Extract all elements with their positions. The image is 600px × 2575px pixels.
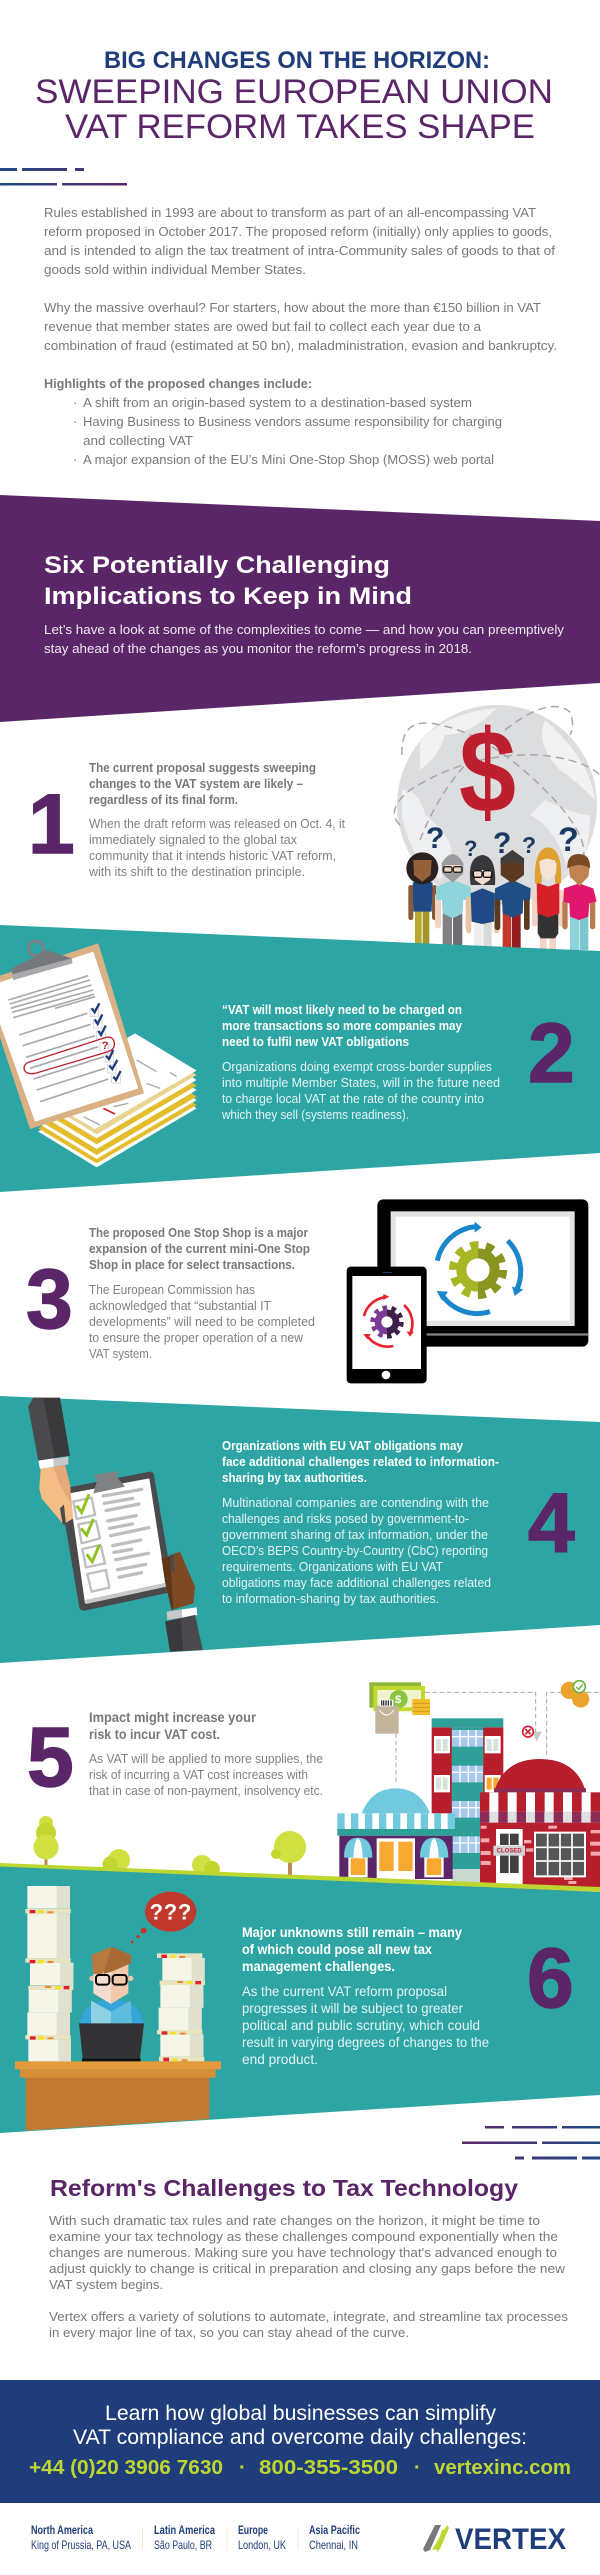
closing text: adjust quickly to change is critical in preparation and closing any gaps before the new <box>49 2261 566 2276</box>
closing text: in every major line of tax, so you can stay ahead of the curve. <box>49 2325 409 2340</box>
closing text: changes are numerous. Making sure you have technology that's advanced enough to <box>49 2245 557 2260</box>
item 2: text: into multiple Member States, will in the future need <box>222 1076 500 1090</box>
desk <box>15 2061 221 2131</box>
item 5: text: risk of incurring a VAT cost increases with <box>89 1768 308 1782</box>
thought bubble: ??? <box>150 1900 191 1925</box>
item 1: text: immediately signaled to the global tax <box>89 833 298 847</box>
item 4: text: OECD’s BEPS Country-by-Country (CbC) reporting <box>222 1544 488 1558</box>
icon: blue arrows <box>437 1222 523 1314</box>
person 2 <box>435 854 472 945</box>
item 1: text: changes to the VAT system are likely – <box>89 777 303 791</box>
icon: coins with check <box>561 1681 589 1708</box>
thought bubble <box>131 1892 196 1943</box>
item 1: text: community that it intends historic VAT reform, <box>89 849 336 863</box>
lower hand <box>162 1552 203 1652</box>
illustration: laptop and tablet with gears <box>347 1199 588 1383</box>
illustration: worker buried in paper stacks <box>15 1886 221 2131</box>
panel: item 6 teal band <box>0 1866 600 2133</box>
question marks: ? <box>464 836 477 861</box>
item 4: text: face additional challenges related to information- <box>222 1455 499 1469</box>
intro text: reform proposed in October 2017. The proposed reform (initially) only applies to goods, <box>44 224 552 239</box>
item 6: text: Major unknowns still remain – many <box>242 1924 462 1940</box>
icon: green gear <box>453 1245 503 1295</box>
item 4: text: sharing by tax authorities. <box>222 1471 367 1485</box>
ground line <box>0 1863 600 1892</box>
closing text: VAT system begins. <box>49 2277 163 2292</box>
item 4: text: to information-sharing by tax authorities. <box>222 1592 439 1606</box>
person 5 <box>532 847 564 950</box>
title: BIG CHANGES ON THE HORIZON: <box>104 47 490 74</box>
item 3: text: developments” will need to be completed <box>89 1315 315 1329</box>
upper hand <box>28 1398 73 1525</box>
item 3: text <box>89 1226 315 1361</box>
footer offices: London, UK <box>238 2538 286 2552</box>
item 2: text: to charge local VAT at the rate of the country into <box>222 1092 484 1106</box>
contact details: · <box>414 2457 421 2479</box>
intro text: Why the massive overhaul? For starters, how about the more than €150 billion in VAT <box>44 300 541 315</box>
item 4: text: requirements. Organizations with EU VAT <box>222 1560 443 1574</box>
contact details: +44 (0)20 3906 7630 <box>29 2457 223 2479</box>
heading: reform's challenges: Reform's Challenges to Tax Technology <box>50 2175 518 2201</box>
monitor <box>377 1199 588 1347</box>
intro text: combination of fraud (estimated at 50 bn), maladministration, evasion and bankruptcy. <box>44 338 557 353</box>
contact details: vertexinc.com <box>434 2457 571 2479</box>
illustration: city with shops and payment flow <box>337 1681 600 1891</box>
panel: six implications banner <box>0 495 600 722</box>
banner text <box>44 622 565 656</box>
call to action text: VAT compliance and overcome daily challenges: <box>73 2426 527 2449</box>
intro text: goods sold within individual Member States. <box>44 262 306 277</box>
illustration: globe, dollar and people <box>394 705 600 950</box>
banner text: Let’s have a look at some of the complexities to come — and how you can preemptively <box>44 622 565 637</box>
question marks: ? <box>426 822 444 855</box>
item 6: text: of which could pose all new tax <box>242 1941 432 1957</box>
call to action text: Learn how global businesses can simplify <box>105 2402 496 2425</box>
item 4: text: obligations may face additional challenges related <box>222 1576 491 1590</box>
question marks <box>426 821 579 861</box>
item 6: text: end product. <box>242 2051 318 2067</box>
item 3: text: expansion of the current mini-One Stop <box>89 1242 310 1256</box>
item 2: text <box>221 1003 500 1122</box>
item 4: text: Organizations with EU VAT obligations may <box>222 1439 463 1453</box>
item 3: text: to ensure the proper operation of a new <box>89 1331 304 1345</box>
icon: banknote and bag <box>369 1682 430 1734</box>
person 4 <box>495 850 531 950</box>
highlights list: Having Business to Business vendors assume responsibility for charging <box>83 414 502 429</box>
item 6: text: As the current VAT reform proposal <box>242 1983 447 1999</box>
right paper stack <box>157 1953 205 2061</box>
apartment building <box>432 1718 503 1882</box>
panel: item 2 teal band <box>0 925 600 1192</box>
item 6: text: political and public scrutiny, which could <box>242 2017 480 2033</box>
item 6: text: progresses it will be subject to greater <box>242 2000 463 2016</box>
highlights list: A shift from an origin-based system to a destination-based system <box>83 395 472 410</box>
laptop <box>79 2023 144 2061</box>
item 1: text: with its shift to the destination principle. <box>88 865 305 879</box>
dashed flow lines <box>396 1692 600 1784</box>
banner heading <box>44 552 412 610</box>
person 1 <box>406 852 438 944</box>
item 4: number: 4 <box>528 1476 575 1570</box>
worker <box>79 1947 144 2061</box>
illustration: clipboard and papers <box>0 941 197 1167</box>
item 4: text: government sharing of tax information, under the <box>222 1528 488 1542</box>
item 1: number: 1 <box>28 777 75 871</box>
footer offices <box>31 2523 360 2552</box>
icon: dollar sign: $ <box>459 706 516 838</box>
item 1: text: The current proposal suggests sweeping <box>89 761 316 775</box>
highlights list: and collecting VAT <box>83 433 193 448</box>
panel: call to action <box>0 2380 600 2503</box>
highlights list: · <box>73 395 77 410</box>
item 5: number: 5 <box>27 1710 74 1804</box>
item 1: text: regardless of its final form. <box>89 793 238 807</box>
clipboard: ? <box>102 1040 109 1052</box>
footer offices: Chennai, IN <box>309 2538 358 2552</box>
item 3: number: 3 <box>26 1252 73 1346</box>
left paper stack <box>25 1886 73 2061</box>
intro text: Rules established in 1993 are about to transform as part of an all-encompassing VAT <box>44 205 536 220</box>
highlights list: A major expansion of the EU’s Mini One-Stop Shop (MOSS) web portal <box>83 452 494 467</box>
item 3: text: The proposed One Stop Shop is a major <box>89 1226 308 1240</box>
illustration: trees <box>34 1816 306 1877</box>
item 4: text: challenges and risks posed by government-to- <box>222 1512 469 1526</box>
title: SWEEPING EUROPEAN UNION <box>35 73 553 111</box>
item 2: text: “VAT will most likely need to be charged on <box>222 1003 462 1017</box>
contact details <box>29 2457 571 2479</box>
item 5: text: Impact might increase your <box>89 1709 256 1725</box>
footer offices: King of Prussia, PA, USA <box>31 2538 131 2552</box>
globe <box>394 705 600 905</box>
item 6: text: management challenges. <box>242 1958 395 1974</box>
tablet <box>347 1267 427 1383</box>
call to action text <box>73 2402 527 2449</box>
title: VAT REFORM TAKES SHAPE <box>65 108 535 146</box>
item 3: text: acknowledged that “substantial IT <box>89 1299 271 1313</box>
footer offices: São Paulo, BR <box>154 2538 212 2552</box>
title <box>35 47 553 146</box>
item 2: text: Organizations doing exempt cross-border supplies <box>222 1060 492 1074</box>
item 5: text: that in case of non-payment, insolvency etc. <box>89 1784 323 1798</box>
item 1: text <box>88 761 346 879</box>
item 4: text: Multinational companies are contending with the <box>222 1496 489 1510</box>
item 6: text: result in varying degrees of changes to the <box>242 2034 489 2050</box>
footer offices: Asia Pacific <box>309 2523 360 2537</box>
panel: item 4 teal band <box>0 1396 600 1663</box>
banner heading: Six Potentially Challenging <box>44 552 390 579</box>
item 3: text: Shop in place for select transactions. <box>89 1258 295 1272</box>
highlights list: · <box>73 414 77 429</box>
intro text <box>44 205 557 353</box>
item 2: text: which they sell (systems readiness). <box>221 1108 409 1122</box>
paper stack <box>33 1033 197 1167</box>
closed red shop: CLOSED <box>497 1848 522 1855</box>
item 2: text: more transactions so more companies may <box>222 1019 462 1033</box>
highlights list: Highlights of the proposed changes include: <box>44 376 312 391</box>
question marks: ? <box>558 821 579 859</box>
footer offices: North America <box>31 2523 93 2537</box>
clipboard <box>60 1471 173 1611</box>
highlights list: · <box>73 452 77 467</box>
item 1: text: When the draft reform was released on Oct. 4, it <box>89 817 346 831</box>
closing text: Vertex offers a variety of solutions to automate, integrate, and streamline tax processes <box>49 2309 569 2324</box>
contact details: 800-355-3500 <box>259 2457 398 2479</box>
item 5: text <box>89 1709 323 1798</box>
item 3: text: VAT system. <box>89 1347 152 1361</box>
icon: purple gear <box>373 1308 401 1336</box>
item 2: number: 2 <box>528 1006 575 1100</box>
person 3 <box>466 855 499 947</box>
banner heading: Implications to Keep in Mind <box>44 583 412 610</box>
item 5: text: risk to incur VAT cost. <box>89 1726 220 1742</box>
closing text <box>49 2213 569 2340</box>
item 5: text: As VAT will be applied to more supplies, the <box>89 1752 323 1766</box>
people group <box>406 847 597 950</box>
person 6 <box>562 854 597 950</box>
item 6: number: 6 <box>527 1931 574 2025</box>
question marks: ? <box>522 832 536 858</box>
blue shop <box>337 1788 455 1879</box>
item 3: text: The European Commission has <box>89 1283 255 1297</box>
clipboard <box>0 941 144 1129</box>
intro text: revenue that member states are owed but fail to collect each year due to a <box>44 319 482 334</box>
footer offices: Europe <box>238 2523 268 2537</box>
item 4: text <box>222 1439 499 1606</box>
intro text: and is intended to align the tax treatment of intra-Community sales of goods to that of <box>44 243 555 258</box>
item 6: text <box>242 1924 489 2067</box>
illustration: hands exchanging a checklist <box>28 1398 203 1652</box>
banner text: stay ahead of the changes as you monitor the reform’s progress in 2018. <box>44 641 472 656</box>
highlights list <box>44 376 502 467</box>
item 2: text: need to fulfil new VAT obligations <box>222 1035 409 1049</box>
contact details: · <box>239 2457 246 2479</box>
closing text: examine your tax technology as these challenges compound exponentially when the <box>49 2229 558 2244</box>
footer offices: Latin America <box>154 2523 215 2537</box>
logo: Vertex: VERTEX <box>455 2523 566 2556</box>
icon: rejected marker <box>523 1726 542 1742</box>
closed red shop <box>480 1759 600 1891</box>
question marks: ? <box>493 827 511 860</box>
icon: red arrows <box>363 1294 414 1347</box>
icon: banknote and bag: $ <box>395 1694 402 1706</box>
closing text: With such dramatic tax rules and rate changes on the horizon, it might be time to <box>49 2213 540 2228</box>
